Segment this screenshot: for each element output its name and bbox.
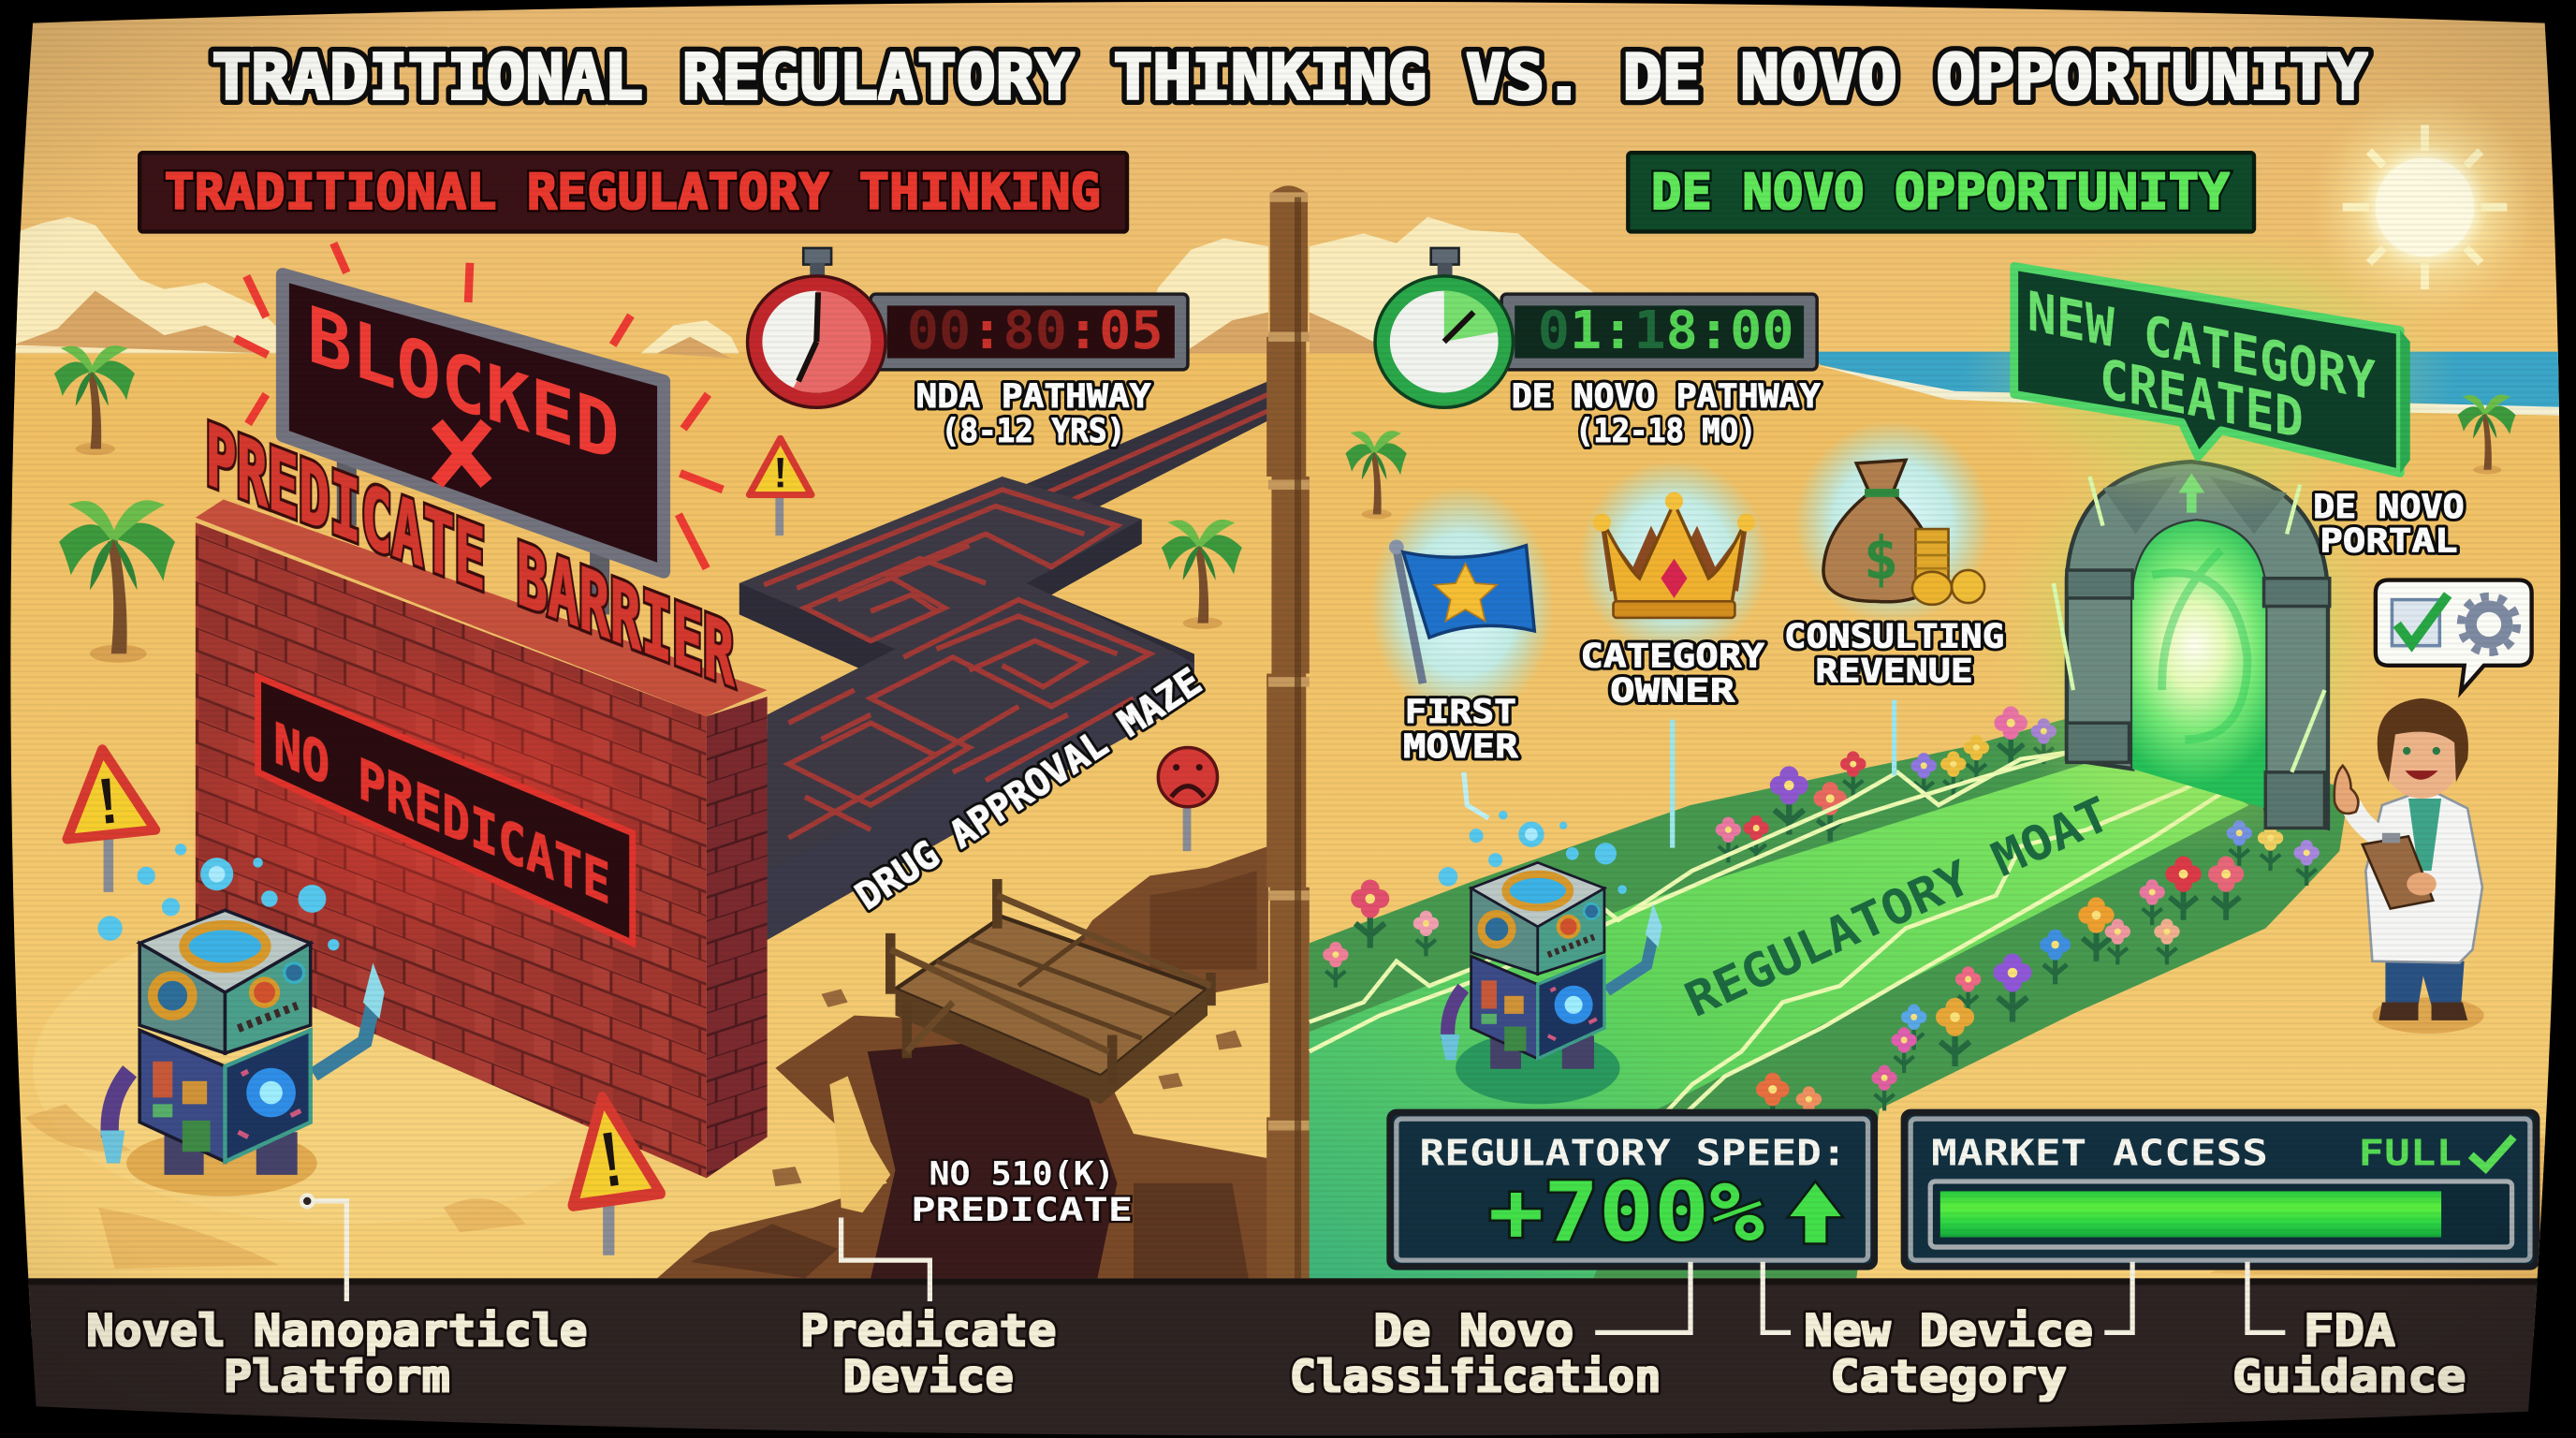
de novo portal label: PORTAL bbox=[2320, 522, 2458, 561]
left section banner bbox=[139, 153, 1127, 231]
consulting revenue benefit bbox=[1784, 420, 2004, 775]
scientist bbox=[2334, 698, 2484, 1034]
progress bar bbox=[1930, 1181, 2512, 1247]
sad face sign bbox=[1158, 748, 1218, 851]
drug approval maze bbox=[739, 381, 1268, 940]
label: predicate device: Device bbox=[842, 1352, 1014, 1403]
label: de novo classification: Classification bbox=[1290, 1352, 1661, 1403]
left stopwatch timer bbox=[748, 248, 1188, 407]
label: no 510k predicate: PREDICATE bbox=[911, 1191, 1133, 1229]
sign text line 1: NEW CATEGORY bbox=[2027, 279, 2376, 413]
label: fda guidance: Guidance bbox=[2232, 1352, 2466, 1403]
market access panel bbox=[1904, 1112, 2537, 1267]
left section banner: TRADITIONAL REGULATORY THINKING bbox=[165, 164, 1101, 221]
first mover benefit: MOVER bbox=[1403, 727, 1519, 766]
full status: FULL bbox=[2358, 1132, 2462, 1174]
label: fda guidance bbox=[2232, 1305, 2466, 1403]
bottom label band bbox=[0, 1278, 2576, 1438]
label: predicate device: Predicate bbox=[800, 1305, 1057, 1357]
label: novel nanoparticle platform bbox=[86, 1305, 587, 1403]
speed value: +700% bbox=[1488, 1165, 1764, 1260]
icon: check bbox=[2471, 1137, 2513, 1168]
market heading: MARKET ACCESS bbox=[1931, 1132, 2268, 1174]
speed heading: REGULATORY SPEED: bbox=[1419, 1132, 1847, 1174]
label: predicate device bbox=[800, 1305, 1057, 1403]
blocked sign bbox=[283, 274, 664, 614]
right pathway label bbox=[1512, 377, 1821, 450]
lightning along moat bbox=[1309, 751, 2222, 1109]
robot left bbox=[97, 844, 385, 1196]
icon: money bag: $ bbox=[1864, 523, 1899, 593]
icon: crown bbox=[1593, 492, 1755, 618]
label: no 510k predicate bbox=[911, 1154, 1133, 1229]
beam bbox=[1464, 772, 1488, 818]
de novo timer display bbox=[1501, 294, 1817, 370]
label: new device category: New Device bbox=[1804, 1305, 2093, 1357]
palm trees bbox=[54, 348, 2516, 663]
de novo timer display: 01:18:00 bbox=[1538, 301, 1794, 361]
icon: up arrow bbox=[1788, 1181, 1843, 1244]
right stopwatch timer bbox=[1375, 248, 1817, 407]
alarm sparks bbox=[235, 243, 723, 568]
label: no 510k predicate: NO 510(K) bbox=[929, 1154, 1115, 1193]
label: novel nanoparticle platform: Platform bbox=[224, 1352, 450, 1403]
warning sign small bbox=[750, 438, 812, 536]
sun bbox=[2327, 110, 2523, 305]
beam bbox=[1892, 700, 1896, 775]
right pathway label: DE NOVO PATHWAY bbox=[1512, 377, 1821, 416]
title: TRADITIONAL REGULATORY THINKING VS. DE NOVO OPPORTUNITY bbox=[212, 40, 2367, 113]
first mover benefit bbox=[1370, 486, 1554, 818]
left pathway label: NDA PATHWAY bbox=[915, 377, 1150, 416]
chasm with broken bridge bbox=[657, 846, 1268, 1278]
icon: red x bbox=[437, 424, 487, 483]
de novo portal label bbox=[2313, 488, 2465, 561]
blocked text: BLOCKED bbox=[307, 288, 620, 479]
clouds and dunes right bbox=[1310, 217, 1593, 353]
right pathway label: (12-18 MO) bbox=[1575, 412, 1756, 450]
label: de novo classification: De Novo bbox=[1373, 1305, 1573, 1357]
consulting revenue benefit: REVENUE bbox=[1815, 652, 1973, 690]
de novo portal bbox=[1988, 411, 2398, 855]
ocean bbox=[1808, 352, 2576, 416]
icon: money bag bbox=[1823, 460, 1984, 605]
de novo portal label: DE NOVO bbox=[2313, 488, 2465, 526]
leader lines bbox=[301, 1196, 2285, 1332]
regulatory moat grass bbox=[1310, 718, 2349, 1278]
left pathway label: (8-12 YRS) bbox=[942, 412, 1125, 450]
label: first mover: FIRST bbox=[1405, 693, 1516, 731]
speech bubble with check and gear bbox=[2376, 580, 2532, 692]
label: new device category: Category bbox=[1830, 1352, 2067, 1403]
right section banner bbox=[1628, 153, 2254, 231]
nda timer display: 00:80:05 bbox=[907, 301, 1164, 361]
icon: green stopwatch bbox=[1375, 248, 1513, 407]
warning sign upper left bbox=[58, 745, 155, 892]
label: new device category bbox=[1804, 1305, 2093, 1403]
warning sign lower bbox=[559, 1092, 661, 1255]
label: de novo classification bbox=[1290, 1305, 1661, 1403]
robot right bbox=[1439, 811, 1662, 1104]
no predicate plaque bbox=[212, 667, 677, 948]
beam bbox=[1670, 720, 1675, 848]
nda timer display bbox=[871, 294, 1188, 370]
icon: red stopwatch bbox=[748, 248, 886, 407]
post divider bbox=[1266, 185, 1311, 1278]
predicate barrier text: PREDICATE BARRIER bbox=[205, 404, 735, 707]
right section banner: DE NOVO OPPORTUNITY bbox=[1651, 164, 2230, 221]
label: consulting revenue: CONSULTING bbox=[1784, 617, 2004, 655]
category owner benefit bbox=[1579, 460, 1769, 848]
no predicate text: NO PREDICATE bbox=[273, 710, 610, 918]
icon: flag bbox=[1389, 540, 1534, 683]
brick wall: predicate barrier bbox=[196, 500, 768, 1178]
flowers bbox=[1323, 706, 2320, 1132]
drug approval maze label: DRUG APPROVAL MAZE bbox=[848, 659, 1209, 918]
clouds and dunes left bbox=[13, 217, 1268, 359]
label: category owner: CATEGORY bbox=[1580, 638, 1764, 676]
label: novel nanoparticle platform: Novel Nanoparticle bbox=[86, 1305, 587, 1357]
category owner benefit: OWNER bbox=[1610, 671, 1735, 710]
left pathway label bbox=[915, 377, 1150, 450]
new category created sign bbox=[1963, 222, 2456, 518]
bridge bbox=[890, 879, 1211, 1104]
regulatory moat label: REGULATORY MOAT bbox=[1677, 787, 2118, 1029]
regulatory speed panel bbox=[1390, 1112, 1875, 1267]
sign text line 2: CREATED bbox=[2100, 346, 2304, 451]
label: fda guidance: FDA bbox=[2304, 1305, 2395, 1357]
